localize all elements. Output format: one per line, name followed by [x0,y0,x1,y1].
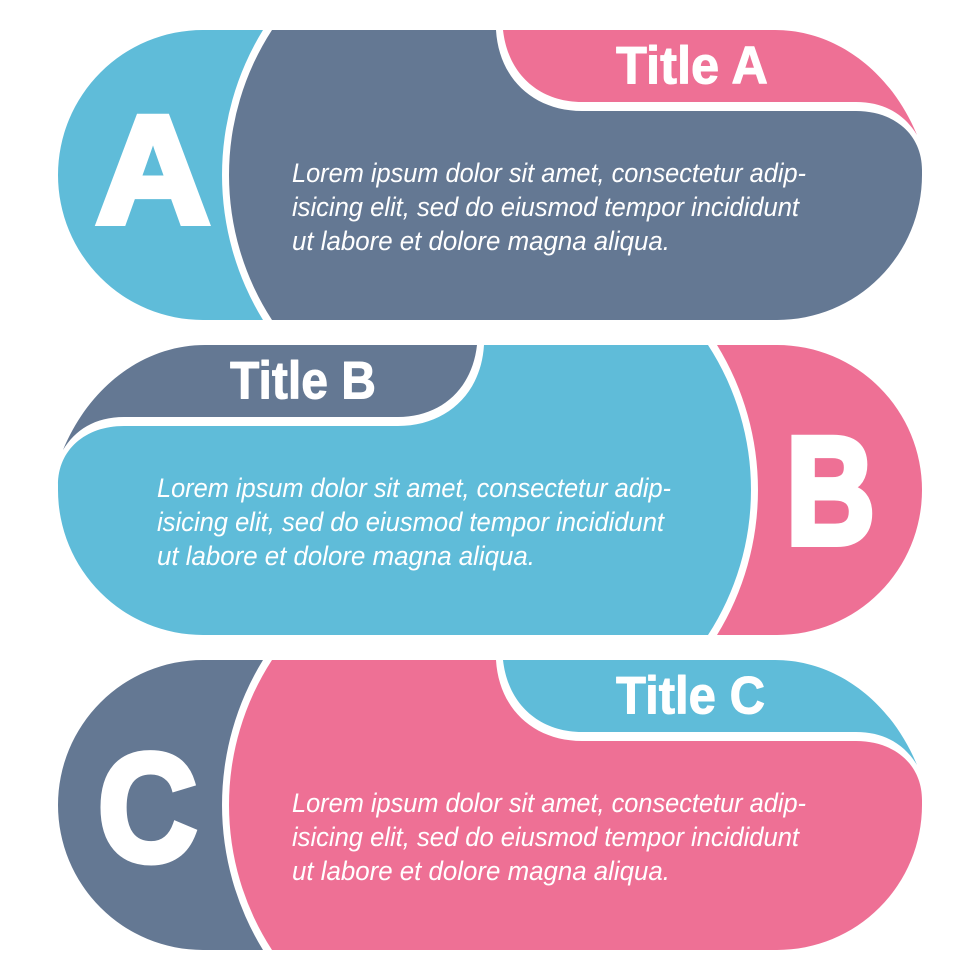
panel: C [58,660,922,950]
text block C: Lorem ipsum dolor sit amet, consectetur adip- [292,788,806,818]
heading: Title B: Title B [230,352,376,410]
text block B: ut labore et dolore magna aliqua. [157,541,535,571]
text block A: Lorem ipsum dolor sit amet, consectetur adip- [292,158,806,188]
text block A: ut labore et dolore magna aliqua. [292,226,670,256]
letter A: A [96,84,210,256]
letter C: C [98,722,197,894]
body panel A [229,30,922,320]
heading: Title C: Title C [616,666,765,726]
panel: A [58,30,922,320]
title tab B [63,345,477,450]
text block A: isicing elit, sed do eiusmod tempor incididunt [292,192,800,222]
letter tab C [58,660,263,950]
text block A [292,158,806,256]
title tab C [503,660,917,765]
body panel C [229,660,922,950]
text block C [292,788,806,886]
letter B: B [786,406,875,576]
body panel B [58,345,751,635]
text block C: ut labore et dolore magna aliqua. [292,856,670,886]
panel: B [58,345,922,635]
text block C: isicing elit, sed do eiusmod tempor incididunt [292,822,800,852]
text block B: Lorem ipsum dolor sit amet, consectetur adip- [157,473,671,503]
text block B: isicing elit, sed do eiusmod tempor incididunt [157,507,665,537]
title tab A [503,30,917,135]
heading: Title A: Title A [616,36,768,96]
text block B [157,473,671,571]
letter tab A [58,30,263,320]
letter tab B [717,345,922,635]
